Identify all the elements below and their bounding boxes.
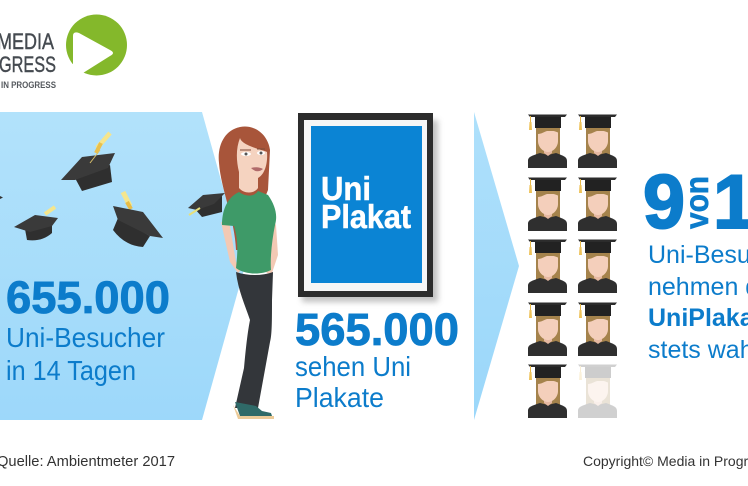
icon: graduation cap small left [14,207,58,240]
illustration: woman [188,127,278,419]
logo wordmark: IN PROGRESS [1,80,56,90]
shirt [222,191,276,274]
logo play icon [66,14,127,76]
stat: 565.000 see posters: sehen Uni [295,351,411,382]
poster title [321,170,411,235]
graduates pictogram grid [528,114,617,418]
arms [221,222,243,273]
poster [311,126,422,283]
text: right description [648,241,748,364]
icon: graduation cap at shoulder [188,193,225,217]
stat: 565.000 see posters [295,304,459,413]
stat: 565.000 see posters: 565.000 [295,304,459,355]
stat: 9 von 10: 9 [643,160,685,245]
stat: 655.000 visitors: Uni-Besucher [6,322,165,353]
shoe [235,402,272,416]
hair [219,127,270,250]
poster title: Plakat [321,198,411,235]
icon: graduation cap right [113,192,163,247]
stat: 655.000 visitors [6,272,170,386]
stat: 9 von 10 [643,160,748,245]
poster frame [298,113,438,302]
frame shadow [302,120,438,302]
icon: graduation cap large [61,133,115,191]
eyes and mouth [240,149,265,171]
mat [304,120,427,291]
trousers [235,272,273,408]
frame [298,113,433,297]
face and neck [237,138,267,192]
icon: partial cap at left edge [0,196,3,199]
logo wordmark: GRESS [0,52,56,77]
source note: Quelle: Ambientmeter 2017 [0,454,175,470]
arrow: divider chevron [474,112,519,420]
stat: 9 von 10: von [678,176,715,229]
logo [0,14,127,90]
poster title: Uni [321,170,371,207]
logo wordmark [0,29,56,90]
stat: 655.000 visitors: 655.000 [6,272,170,323]
stat: 655.000 visitors: in 14 Tagen [6,355,136,386]
stat: 565.000 see posters: Plakate [295,382,384,413]
panel: blue arrow background [0,112,245,420]
